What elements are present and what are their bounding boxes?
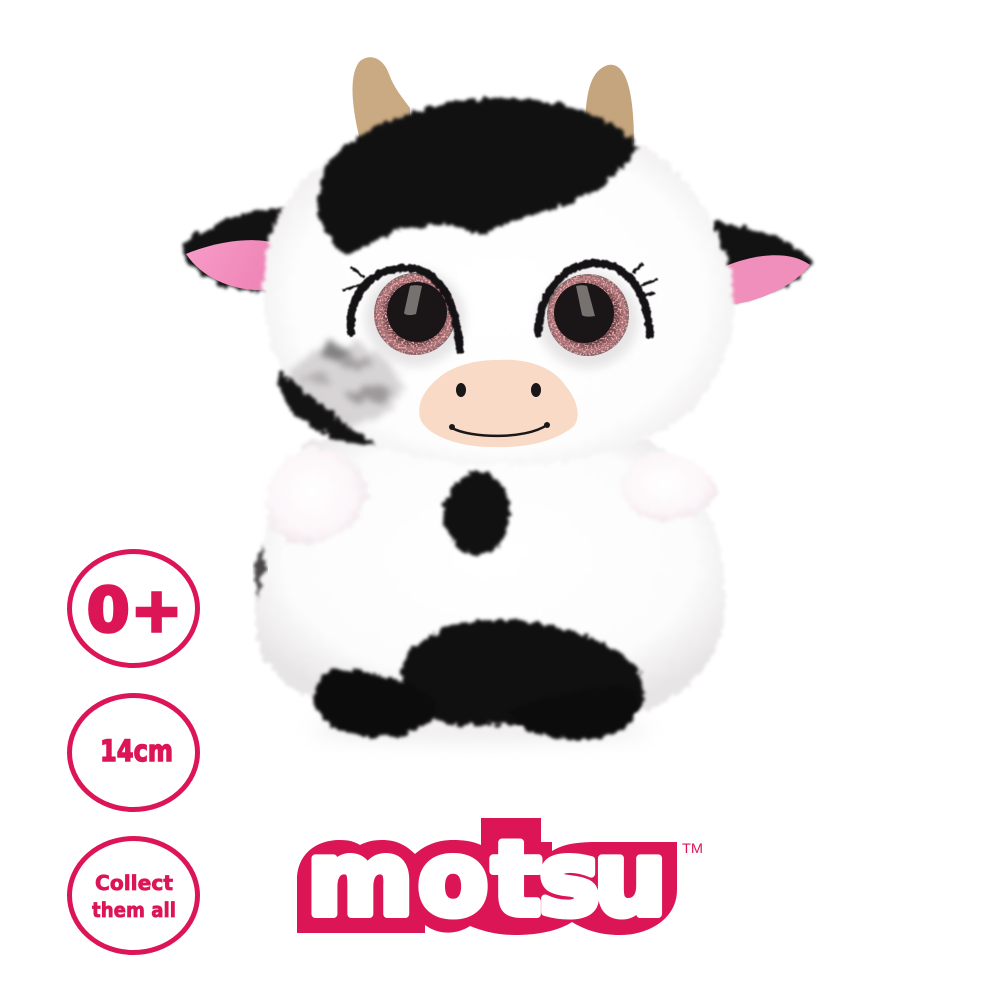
badge: collect them all: them all — [92, 898, 176, 922]
head — [264, 112, 734, 465]
head black top patch — [318, 98, 640, 254]
badge: age 0+ — [70, 552, 198, 666]
right eyelash — [538, 263, 656, 335]
logo trademark: TM — [682, 840, 703, 856]
belly spot — [444, 472, 510, 555]
bottom black patch — [402, 620, 644, 725]
left horn — [352, 57, 410, 140]
left eye — [365, 270, 465, 366]
right nostril — [531, 383, 541, 397]
cheek grey fur — [289, 344, 401, 425]
mouth — [449, 422, 550, 436]
left ear — [182, 208, 287, 292]
left arm — [267, 448, 368, 545]
cheek black patch — [278, 370, 378, 447]
left foot — [314, 669, 437, 737]
left eyelash — [344, 268, 460, 350]
floor shadow — [310, 720, 650, 740]
badge: 14cm — [70, 696, 198, 810]
logo: motsu: motsu — [307, 820, 667, 939]
badge: collect them all: Collect — [95, 871, 173, 895]
right arm — [621, 453, 718, 521]
badge: 14cm: 14cm — [100, 734, 173, 768]
right horn — [585, 65, 634, 145]
body — [254, 440, 725, 722]
body left edge patch — [255, 545, 266, 600]
right foot — [508, 687, 637, 739]
left nostril — [456, 383, 466, 397]
badge: age 0+: 0+ — [87, 575, 182, 646]
plush cow toy — [182, 57, 814, 740]
logo block backing — [297, 818, 677, 935]
right eye — [538, 272, 638, 368]
muzzle — [419, 360, 578, 447]
badge: collect them all — [70, 838, 198, 952]
right ear — [714, 222, 814, 304]
